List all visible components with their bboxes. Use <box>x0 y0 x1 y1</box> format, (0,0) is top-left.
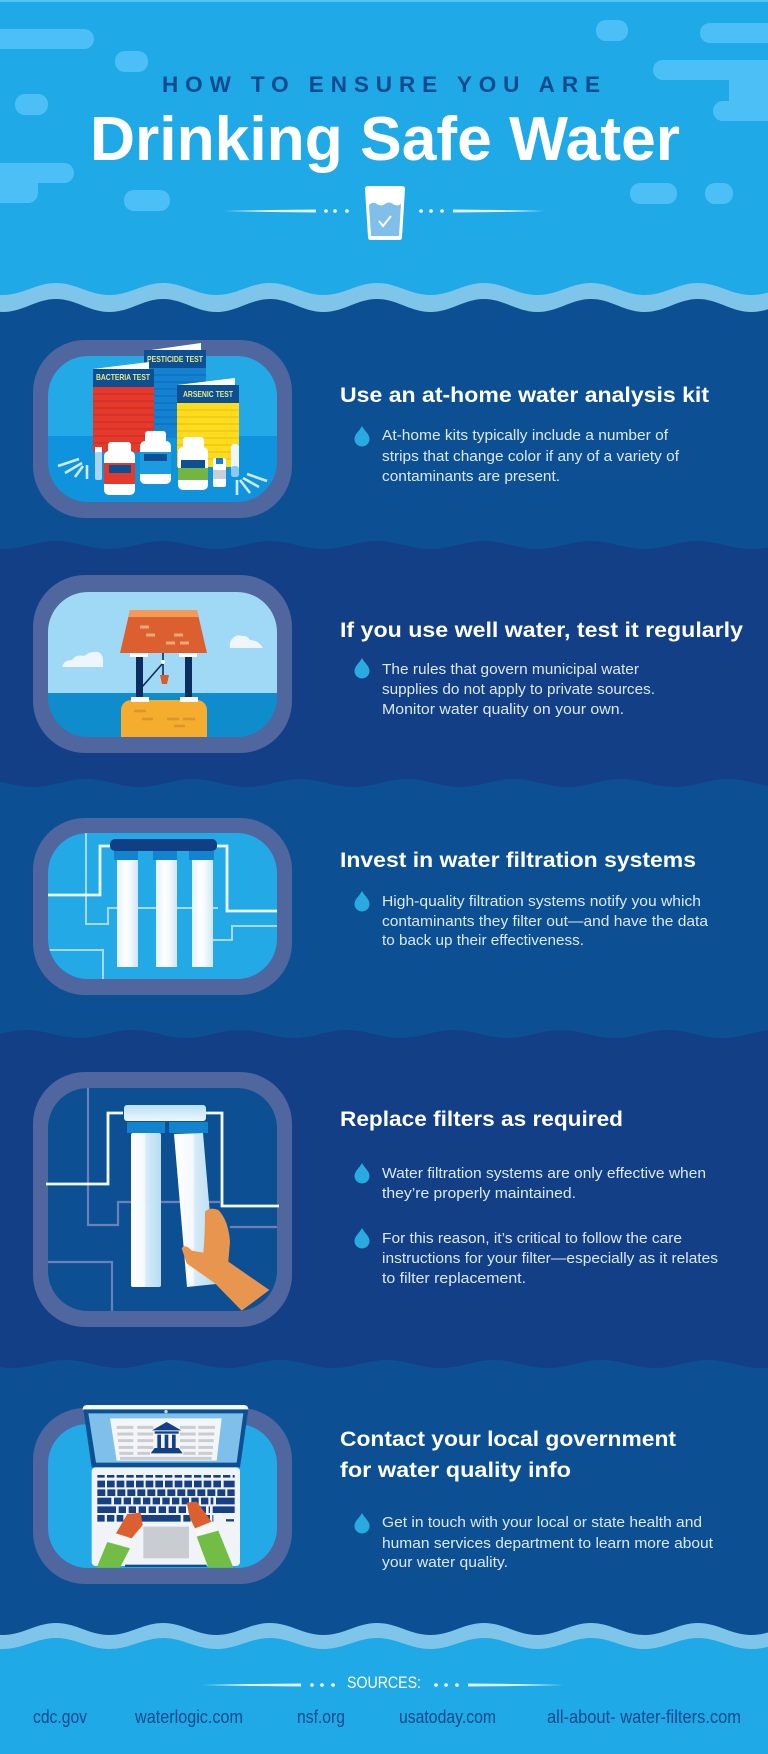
title: Drinking Safe Water <box>90 105 680 174</box>
well <box>120 610 207 737</box>
laptop screen <box>83 1405 248 1467</box>
text: replace filters: to filter replacement. <box>382 1271 526 1287</box>
text: contact local government: for water quality info <box>340 1459 571 1482</box>
panel: at-home water analysis kit illustration <box>33 340 292 518</box>
text: at-home water analysis kit: contaminants are present. <box>382 469 560 485</box>
text: at-home water analysis kit <box>340 384 709 485</box>
panel: replace filters illustration <box>33 1072 292 1327</box>
pamphlet: bacteria test: BACTERIA TEST <box>96 372 151 382</box>
text: well water: The rules that govern municipal water <box>382 662 639 678</box>
text: replace filters: instructions for your filter—especially as it relates <box>382 1251 718 1267</box>
text: contact local government: Contact your local government <box>340 1428 676 1451</box>
sources list: all-about- water-filters.com <box>547 1707 741 1727</box>
sources list <box>33 1707 741 1727</box>
background clouds <box>0 20 768 211</box>
sources list: usatoday.com <box>399 1707 496 1727</box>
pamphlet: arsenic test <box>177 378 239 467</box>
text: contact local government <box>340 1428 713 1571</box>
pamphlet: bacteria test <box>93 362 154 452</box>
text: contact local government: human services department to learn more about <box>382 1536 713 1552</box>
text: replace filters <box>340 1108 718 1287</box>
text: contact local government: your water quality. <box>382 1555 508 1571</box>
bottom wave <box>0 1623 768 1754</box>
pamphlet: pesticide test <box>144 343 206 438</box>
text: at-home water analysis kit: Use an at-home water analysis kit <box>340 384 709 407</box>
hands typing <box>97 1502 233 1568</box>
text: replace filters: Replace filters as required <box>340 1108 623 1131</box>
sources list: cdc.gov <box>33 1707 87 1727</box>
filter cartridges <box>110 839 217 967</box>
panel: local government laptop illustration <box>33 1405 292 1584</box>
keyboard deck <box>92 1467 240 1567</box>
sources list: waterlogic.com <box>134 1707 243 1727</box>
title: HOW TO ENSURE YOU ARE <box>162 72 600 97</box>
text: water filtration systems: Invest in water filtration systems <box>340 849 696 872</box>
text: well water: If you use well water, test it regularly <box>340 619 743 642</box>
top wave <box>0 283 768 560</box>
title <box>90 72 680 174</box>
sources heading <box>202 1673 564 1692</box>
text: replace filters: Water filtration systems are only effective when <box>382 1166 706 1182</box>
text: replace filters: they’re properly maintained. <box>382 1186 576 1202</box>
header background <box>0 0 768 340</box>
text: water filtration systems: High-quality filtration systems notify you which <box>382 894 701 910</box>
text: water filtration systems: to back up their effectiveness. <box>382 933 584 949</box>
text: water filtration systems: contaminants they filter out—and have the data <box>382 914 709 930</box>
government building icon <box>151 1422 183 1453</box>
text: contact local government: Get in touch with your local or state health and <box>382 1515 702 1531</box>
text: water filtration systems <box>340 849 709 949</box>
pamphlet: pesticide test: PESTICIDE TEST <box>147 354 204 364</box>
clouds <box>62 635 263 667</box>
sources list: nsf.org <box>297 1707 345 1727</box>
pamphlet: arsenic test: ARSENIC TEST <box>183 389 234 399</box>
test strips <box>58 459 267 495</box>
text: well water: Monitor water quality on your own. <box>382 702 624 718</box>
section background bands <box>0 541 768 1750</box>
panel: water filtration system illustration <box>33 818 292 995</box>
text: at-home water analysis kit: strips that change color if any of a variety of <box>382 449 680 465</box>
hand <box>182 1209 269 1311</box>
text: well water: supplies do not apply to private sources. <box>382 682 655 698</box>
panel: well water illustration <box>33 575 292 753</box>
title divider with water glass icon <box>224 186 545 240</box>
text: replace filters: For this reason, it’s critical to follow the care <box>382 1231 682 1247</box>
filter cartridges <box>124 1105 216 1287</box>
text: well water <box>340 619 743 718</box>
text: at-home water analysis kit: At-home kits typically include a number of <box>382 428 669 444</box>
sources heading: SOURCES: <box>347 1673 421 1692</box>
test bottles and vials <box>95 431 239 495</box>
